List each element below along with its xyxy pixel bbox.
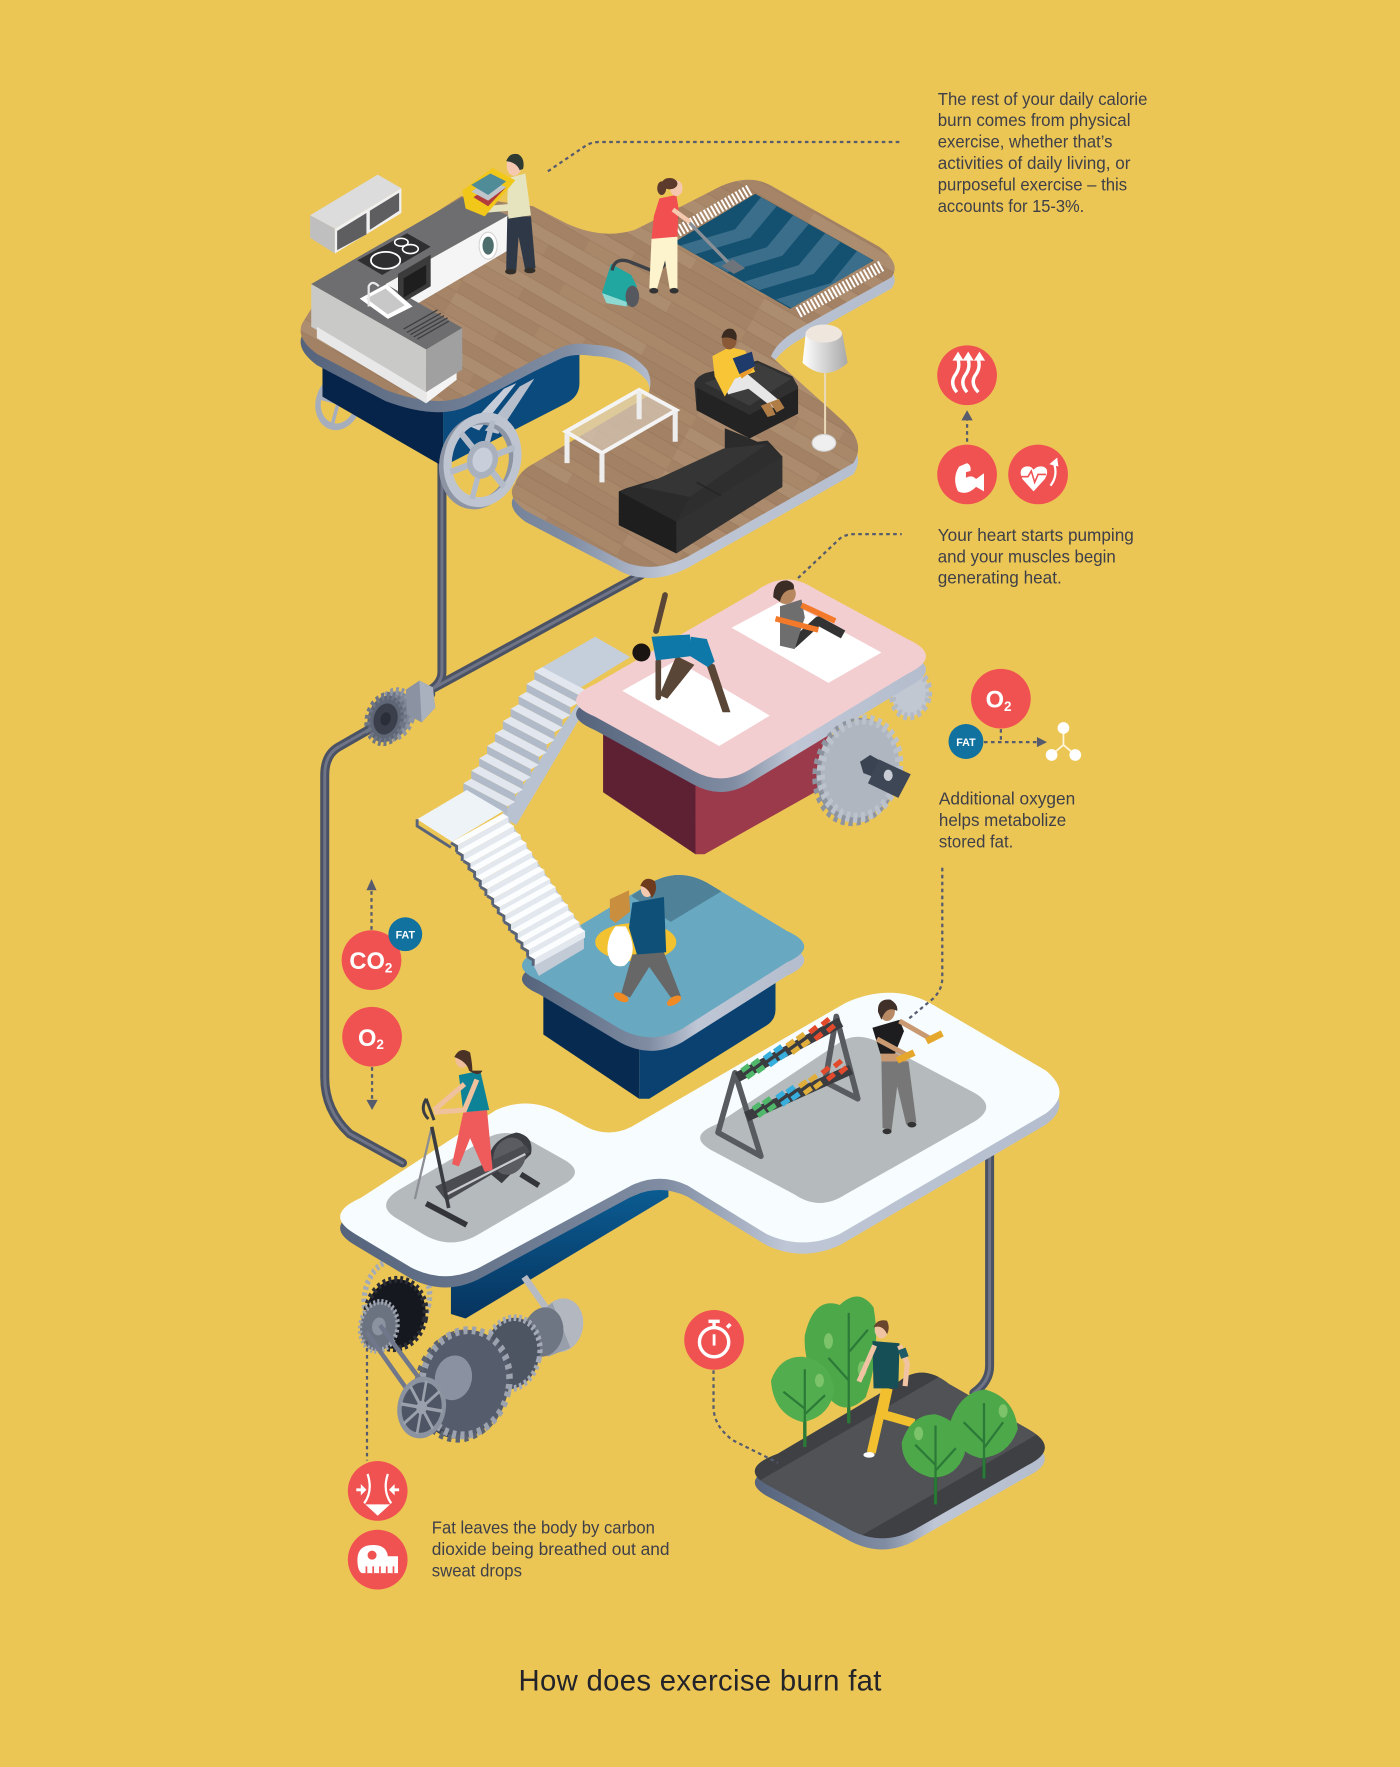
- callout text: oxygen: helps metabolize: [939, 810, 1066, 830]
- trees in front of runner: [902, 1389, 1018, 1504]
- icon: carbon dioxide and fat leaving: CO: [349, 949, 385, 975]
- callout text: oxygen: Additional oxygen: [939, 789, 1075, 809]
- icon: stopwatch: [684, 1310, 744, 1370]
- callout text: fat leaves the body: Fat leaves the body by carbon: [432, 1518, 655, 1538]
- person: man carrying laundry basket: [462, 154, 535, 274]
- connector: stopwatch to park: [714, 1370, 778, 1463]
- callout text: heart and muscles: [938, 525, 1134, 588]
- callout text: heart and muscles: and your muscles begin: [938, 546, 1116, 566]
- sofa: [619, 428, 782, 553]
- callout text: daily activities: The rest of your daily calorie: [938, 89, 1147, 109]
- trees behind runner: [771, 1296, 876, 1447]
- gear: large yoga platform gear and bracket: [807, 712, 911, 828]
- callout text: daily activities: accounts for 15-3%.: [938, 196, 1084, 216]
- connector: gears to waist icon: [366, 1341, 368, 1460]
- person: yoga seated stretch: [773, 580, 843, 649]
- panel: errands platform with navy base: [522, 875, 804, 1099]
- panel: park path: [754, 1372, 1045, 1550]
- infographic canvas: [300, 92, 1147, 1691]
- wheel and belt: home platform: [434, 379, 534, 512]
- callout text: oxygen: stored fat.: [939, 831, 1013, 851]
- connector: daily activities callout: [548, 142, 899, 171]
- callout text: fat leaves the body: [432, 1518, 670, 1581]
- icon: oxygen metabolising fat: 2: [1004, 699, 1012, 714]
- staircase: landing and lower flight: [417, 790, 585, 976]
- icon: carbon dioxide and fat leaving: [342, 879, 422, 990]
- icon: oxygen metabolising fat: [948, 669, 1081, 761]
- callout text: heart and muscles: Your heart starts pumping: [938, 525, 1134, 545]
- icon: flexed muscle: [937, 445, 997, 504]
- callout text: fat leaves the body: sweat drops: [432, 1561, 522, 1581]
- person: woman lifting dumbbells: [872, 999, 942, 1134]
- pipe gear and nut: [362, 681, 435, 746]
- icon: oxygen intake: 2: [376, 1037, 384, 1052]
- panel: yoga platform with red base: [576, 579, 933, 854]
- callout text: daily activities: [938, 89, 1147, 216]
- panel: home, lower navy base: [313, 340, 579, 467]
- kitchen wall cabinet: [310, 175, 401, 254]
- connector: heart callout: [798, 534, 902, 578]
- coffee table: [566, 390, 676, 482]
- panel: gym platform: [340, 993, 1059, 1287]
- icon: rising heat: [937, 345, 997, 405]
- icon: measuring tape: [348, 1530, 408, 1590]
- gear assembly below gym platform: [356, 1253, 588, 1447]
- title: How does exercise burn fat: [519, 1664, 881, 1697]
- callout text: heart and muscles: generating heat.: [938, 568, 1062, 588]
- icon: oxygen intake: [342, 1007, 402, 1110]
- icon: carbon dioxide and fat leaving: FAT: [396, 930, 415, 942]
- pipe: main connecting pipework: [325, 451, 990, 1393]
- kitchen counter: [311, 197, 508, 403]
- elliptical machine and rider: [415, 1050, 539, 1225]
- icon: oxygen metabolising fat: O: [986, 688, 1004, 714]
- connector: oxygen callout to gym: [907, 868, 942, 1020]
- callout text: daily activities: activities of daily living, or: [938, 153, 1131, 173]
- callout text: daily activities: burn comes from physical: [938, 110, 1130, 130]
- floor lamp: [803, 325, 848, 451]
- icon: oxygen intake: O: [358, 1026, 376, 1052]
- person: carrying shopping bags: [595, 879, 683, 1008]
- icon: waist slimming: [348, 1461, 408, 1521]
- gear: small rear gear: [888, 668, 933, 720]
- staircase: upper flight: [463, 637, 630, 825]
- icon: carbon dioxide and fat leaving: 2: [385, 961, 392, 976]
- blue cylinder under gym platform: [451, 1181, 668, 1318]
- person: woman vacuuming: [602, 178, 745, 307]
- icon: oxygen metabolising fat: FAT: [956, 737, 976, 749]
- callout text: daily activities: purposeful exercise – this: [938, 174, 1127, 194]
- callout text: fat leaves the body: dioxide being breathed out and: [432, 1539, 670, 1559]
- dumbbell rack: [718, 1016, 858, 1156]
- callout text: oxygen: [939, 789, 1075, 851]
- person: jogger: [859, 1320, 914, 1458]
- rug: [674, 190, 881, 313]
- armchair with reading person: [694, 329, 798, 438]
- callout text: daily activities: exercise, whether that’s: [938, 132, 1113, 152]
- panel: home wooden floor: [301, 180, 895, 578]
- person: yoga triangle pose: [632, 595, 730, 712]
- arrow: muscle to heat: [961, 410, 973, 442]
- icon: heart rate rising: [1008, 445, 1068, 504]
